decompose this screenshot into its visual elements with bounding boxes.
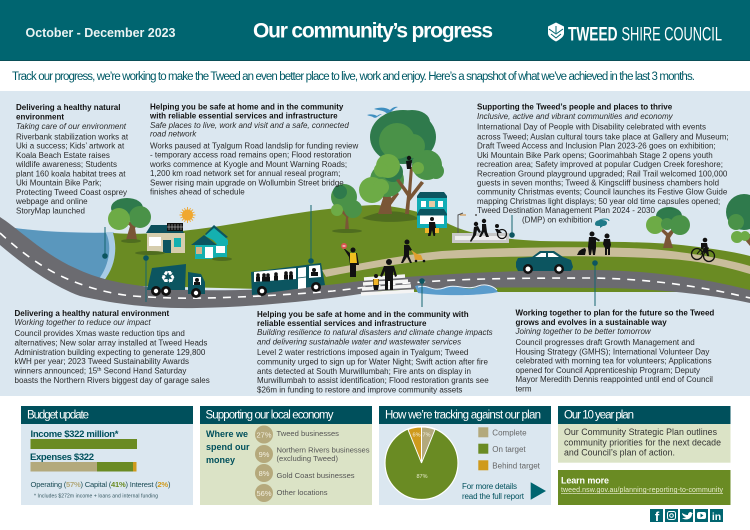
- spend labels: Tweed businesses: [276, 429, 339, 438]
- text: plan for the future: Working together to plan for the future so the Tweed: [516, 308, 714, 318]
- text: plan for the future: opened for Council Apprenticeship Program; Deputy: [516, 366, 700, 375]
- panel: 10 year plan: [558, 406, 730, 463]
- text: healthy natural environment, top: wildlife awareness; Students: [15, 160, 117, 169]
- pie chart: 7%: [423, 432, 431, 438]
- text: healthy natural environment, bottom: th: [97, 367, 102, 373]
- text: safe at home, bottom: ants detected at South Murwillumbah; Fire ants on display in: [257, 367, 471, 376]
- text: healthy natural environment, bottom: Delivering a healthy natural environment: [14, 309, 170, 318]
- legend: on target: [478, 444, 526, 454]
- text: plan for the future: Joining together to be better tomorrow: [514, 327, 652, 336]
- panel: budget update: Budget update: [27, 410, 89, 422]
- text: plan for the future: Council progresses draft Growth Management and: [516, 338, 695, 347]
- text: safe at home, top: Helping you be safe at home and in the community: [150, 102, 344, 112]
- text: people and places: Tweed Destination Management Plan 2024 - 2030: [477, 206, 655, 215]
- text: safe at home, bottom: Level 2 water restrictions imposed again in Tyalgum; Tweed: [257, 348, 468, 357]
- lollipop crossing supervisor: [341, 243, 359, 277]
- text: plan for the future: Mayor Meredith Dennis reappointed until end of Council: [516, 375, 713, 384]
- dark hill shade: [362, 211, 420, 222]
- legend: complete: Complete: [492, 429, 527, 438]
- income label: Income $322 million*: [30, 429, 119, 440]
- panel: tracking against plan: [379, 406, 551, 505]
- text: healthy natural environment, bottom: Administration building expecting to generate 129,800: [14, 348, 206, 357]
- text: healthy natural environment, top: [15, 103, 129, 216]
- text: healthy natural environment, top: plant 160 koala habitat trees at: [16, 170, 126, 178]
- text: people and places: (DMP) on exhibition: [522, 215, 592, 224]
- social media icons: [650, 509, 723, 524]
- text: healthy natural environment, top: StoryMap launched: [16, 206, 85, 216]
- teal house: [191, 225, 232, 261]
- panel: tracking against plan: How we’re tracking against our plan: [385, 410, 541, 422]
- spend stat: 56%: 56%: [256, 489, 272, 498]
- recycling truck: ♻: [160, 268, 176, 288]
- footnote: * Includes $272m income + loans and internal funding: [34, 494, 158, 500]
- water: river: [8, 227, 116, 283]
- where we spend: Where we: [206, 429, 248, 439]
- hill background: [100, 205, 750, 292]
- spend labels: Other locations: [276, 488, 328, 497]
- text: safe at home, top: Sewer rising main upgrade on Wollumbin Street bridge: [150, 178, 344, 187]
- text: safe at home, bottom: Murwillumbah to assist identification; Flood restoration grants see: [257, 376, 489, 385]
- text: safe at home, top: 1,200 km road network set for annual reseal program;: [150, 169, 340, 178]
- tree: hill left: [331, 184, 362, 233]
- legend: complete: [478, 427, 527, 438]
- text: healthy natural environment, top: Riverbank stabilization works at: [16, 132, 129, 142]
- panel: learn more: tweed.nsw.gov.au/planning-reporting-to-community: [561, 487, 724, 494]
- text: plan for the future: [514, 308, 714, 394]
- text: healthy natural environment, bottom: winners announced; 15: [14, 366, 186, 376]
- child crossing: [373, 274, 379, 290]
- adult crossing: [380, 259, 397, 290]
- header band: [0, 0, 750, 61]
- expenses label: Expenses $322: [30, 452, 94, 463]
- text: safe at home, bottom: Building resilience to natural disasters and climate change impacts: [257, 328, 493, 337]
- house with solar panels: [135, 223, 185, 255]
- pin: car: [592, 260, 598, 306]
- text: healthy natural environment, bottom: Second Hand Saturday: [101, 366, 186, 376]
- basketball court: [452, 213, 509, 243]
- spend labels: Northern Rivers businesses: [276, 446, 370, 454]
- intro sentence: Track our progress, we’re working to make the Tweed an even better place to live, work and enjoy. Here’s a snapshot of what we’ve achieved in the last 3 months.: [12, 71, 695, 83]
- pie chart: [385, 426, 458, 500]
- spend stat: 8%: [255, 464, 273, 482]
- spend stat: 56%: [255, 484, 273, 502]
- spend stat: 27%: [255, 426, 273, 444]
- text: safe at home, top: - temporary access road remains open; Flood restoration: [150, 151, 351, 160]
- full report note: read the full report: [462, 492, 525, 501]
- text: safe at home, top: Works paused at Tyalgum Road landslip for funding review: [150, 142, 358, 150]
- large tree group with climbing child: [359, 110, 444, 214]
- text: healthy natural environment, bottom: Council provides Xmas waste reduction tips and: [14, 329, 185, 338]
- logo: Tweed Shire Council: [548, 22, 722, 46]
- text: people and places: community Christmas events; Council launches its Festive Glow Guide: [477, 188, 728, 197]
- recycling truck: [147, 264, 205, 298]
- where we spend: spend our: [206, 442, 250, 452]
- tree: lakeside: [108, 198, 151, 243]
- road: [0, 217, 750, 308]
- social media icons: f: [655, 509, 660, 524]
- tree: hillside right: [646, 207, 690, 248]
- arrow: [531, 482, 546, 500]
- road dashes: [0, 233, 750, 298]
- panel: 10 year plan: Our Community Strategic Plan outlines: [564, 427, 718, 437]
- text: plan for the future: celebrated with morning tea for volunteers; Applications: [516, 357, 712, 366]
- text: people and places: Inclusive, active and vibrant communities and economy: [477, 112, 674, 121]
- legend: behind target: Behind target: [492, 462, 541, 470]
- text: safe at home, top: finishes ahead of schedule: [150, 188, 245, 196]
- birds: [367, 107, 398, 118]
- text: people and places: Supporting the Tweed’s people and places to thrive: [477, 102, 673, 112]
- text: safe at home, top: road network: [150, 130, 197, 138]
- text: safe at home, bottom: [257, 310, 493, 394]
- text: people and places: Uki Mountain Bike Park opens; Goorimahbah Stage 2 opens youth: [477, 151, 713, 160]
- text: safe at home, top: with reliable essential services and infrastructure: [149, 112, 338, 120]
- pie chart: 6%: [413, 432, 421, 438]
- car: [516, 251, 573, 274]
- logo: Tweed Shire Council: TWEED: [568, 24, 618, 46]
- panel: local economy: [200, 406, 372, 505]
- text: plan for the future: Housing Strategy (GMHS); International Volunteer Day: [516, 348, 709, 356]
- text: healthy natural environment, top: Koala Beach Estate raises: [16, 151, 110, 160]
- people talking with dog: [577, 219, 611, 255]
- text: safe at home, bottom: Helping you be safe at home and in the community with: [257, 310, 469, 319]
- text: healthy natural environment, bottom: Working together to reduce our impact: [14, 318, 151, 327]
- panel: budget update: [21, 406, 193, 505]
- shop: [417, 192, 447, 228]
- text: safe at home, bottom: $26m in funding to restore and improve community assets: [257, 386, 462, 394]
- text: healthy natural environment, bottom: boasts the Northern Rivers biggest day of garage sales: [14, 376, 210, 385]
- cyclist: [692, 238, 714, 262]
- text: plan for the future: term: [516, 384, 532, 394]
- panel: 10 year plan: and Council’s plan of action.: [564, 447, 675, 457]
- where we spend: money: [206, 455, 235, 465]
- text: healthy natural environment, top: Delivering a healthy natural: [16, 103, 120, 112]
- text: people and places: Draft Tweed Access and Inclusion Plan 2023-26 goes on exhibition;: [477, 142, 716, 151]
- text: healthy natural environment, top: Taking care of our environment: [16, 122, 127, 131]
- date range: October - December 2023: [26, 26, 176, 40]
- text: safe at home, top: works commence at Kyogle and Mount Warning Roads;: [149, 160, 347, 169]
- social media icons: in: [712, 511, 721, 523]
- pin: bus: [308, 205, 314, 264]
- bus: [251, 263, 325, 296]
- spend labels: Gold Coast businesses: [276, 471, 355, 480]
- text: people and places: guests in seven months; Tweed & Kingscliff business chambers hold: [477, 178, 719, 188]
- legend: on target: On target: [492, 445, 526, 454]
- pin: water: [102, 227, 108, 259]
- text: healthy natural environment, top: Uki a success; Kids’ artwork at: [16, 142, 125, 151]
- pie chart: 87%: [416, 474, 428, 480]
- text: healthy natural environment, bottom: kWH per year; 2023 Tweed Sustainability Awards: [14, 357, 189, 366]
- expenses stacked bar: [30, 462, 136, 472]
- panel: 10 year plan: Our 10 year plan: [564, 410, 634, 422]
- panel: learn more: Learn more: [561, 476, 609, 486]
- full report note: For more details: [462, 482, 517, 491]
- illustrated landscape panel: [0, 91, 750, 396]
- legend: behind target: [478, 460, 541, 470]
- text: safe at home, top: Safe places to live, work and visit and a safe, connected: [150, 121, 349, 130]
- text: safe at home, top: [149, 102, 358, 196]
- spend stat: 8%: 8%: [259, 469, 270, 478]
- spend stat: 9%: [255, 445, 273, 463]
- text: healthy natural environment, top: Uki Mountain Bike Park;: [16, 179, 101, 188]
- pedestrian crossing: [361, 276, 414, 294]
- panel: 10 year plan: community priorities for the next decade: [564, 437, 721, 447]
- text: people and places: mapping Christmas light displays; 50 year old time capsules opened;: [477, 197, 720, 206]
- text: people and places: [477, 102, 729, 224]
- text: people and places: recreation area; Safety improved at popular Cudgen Creek foreshore;: [477, 160, 723, 169]
- shopper with bags: [425, 217, 439, 236]
- text: people and places: Recreation Ground playground upgraded; Rail Trail welcomed 100,000: [477, 169, 728, 178]
- text: healthy natural environment, top: environment: [16, 112, 64, 122]
- text: safe at home, bottom: reliable essential services and infrastructure: [257, 319, 427, 328]
- spend labels: (excluding Tweed): [276, 454, 338, 463]
- floodwater: [415, 285, 498, 295]
- pin: community: [509, 215, 515, 238]
- stroller walker: [401, 240, 425, 263]
- text: safe at home, bottom: and delivering sustainable water and wastewater services: [257, 338, 461, 346]
- text: healthy natural environment, bottom: [14, 309, 210, 385]
- tree: far right: [726, 194, 750, 246]
- text: safe at home, bottom: community urged to sign up for Water Night; Swift action after fire: [257, 358, 488, 366]
- text: healthy natural environment, top: webpage and online: [15, 197, 88, 206]
- text: people and places: across Tweed; Auslan cultural tours take place at Gallery and Museum;: [477, 132, 729, 142]
- text: plan for the future: grows and evolves in a sustainable way: [516, 318, 667, 327]
- sun: [180, 207, 196, 223]
- pin: truck: [143, 255, 149, 302]
- pin: floodwater: [419, 278, 425, 307]
- budget split: Operating (57%) Capital (41%) Interest (2%): [30, 480, 171, 489]
- spend stat: 9%: 9%: [259, 450, 270, 459]
- footpath: [322, 247, 750, 277]
- text: healthy natural environment, bottom: alternatives; New solar array installed at Tweed Heads: [14, 338, 207, 348]
- title: Our community’s progress: [253, 20, 493, 42]
- panel: local economy: Supporting our local economy: [206, 410, 334, 422]
- text: people and places: International Day of People with Disability celebrated with events: [477, 122, 706, 132]
- income bar: [30, 439, 137, 449]
- panel: learn more: [558, 470, 730, 505]
- text: healthy natural environment, top: Protecting Tweed Coast osprey: [16, 188, 127, 197]
- spend stat: 27%: 27%: [256, 430, 272, 440]
